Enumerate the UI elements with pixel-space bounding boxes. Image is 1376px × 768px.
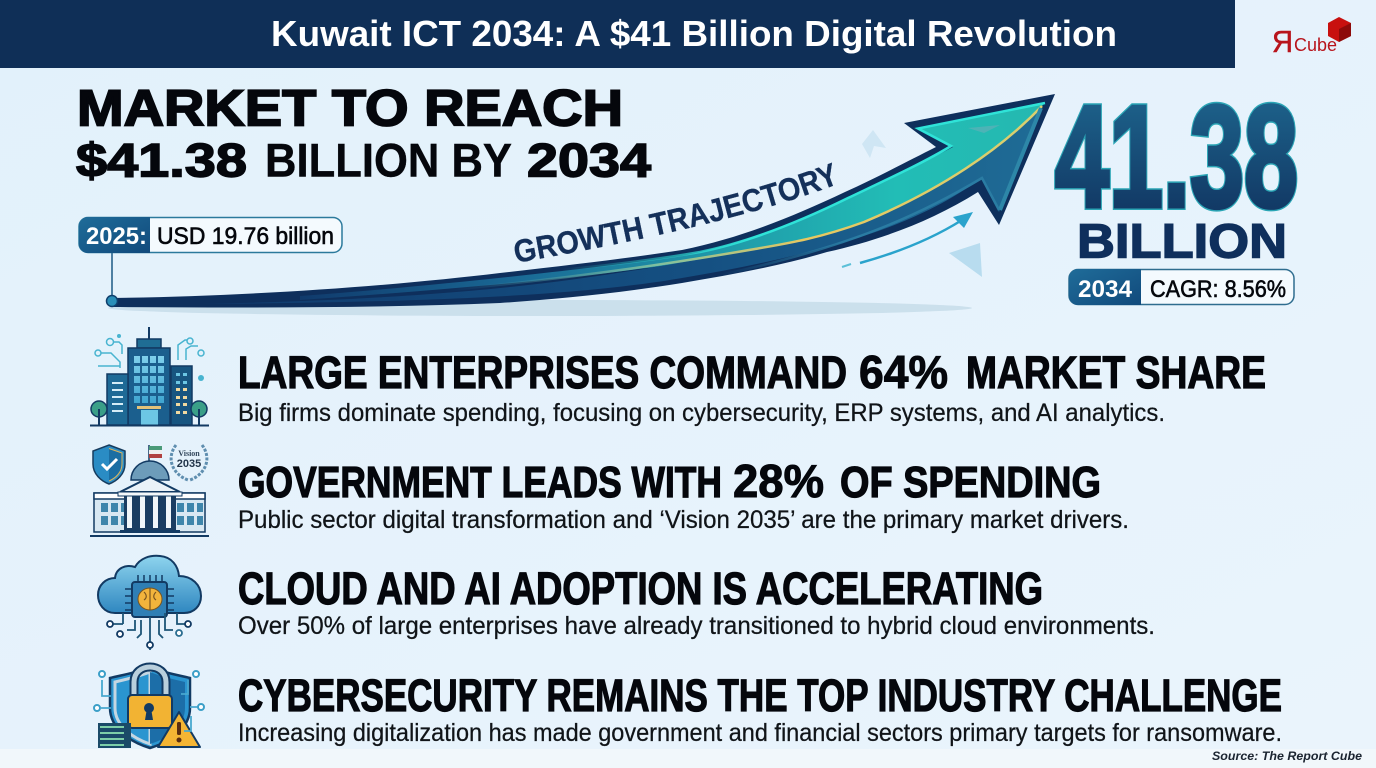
big number: 41.38 billion: BILLION	[1077, 216, 1287, 268]
callout: 2034 cagr: CAGR: 8.56%	[1150, 276, 1286, 303]
callout: 2025 value: 2025:	[86, 223, 147, 250]
logo: RCube: Cube	[1294, 35, 1337, 55]
icon: government building and vision 2035: 2035	[177, 458, 201, 470]
heading: cloud and ai: CLOUD AND AI ADOPTION IS ACCELERATING	[238, 563, 1043, 614]
callout: 2034 cagr: 2034	[1078, 276, 1133, 303]
source note: Source: The Report Cube	[1212, 751, 1363, 763]
label: growth trajectory: GROWTH TRAJECTORY	[514, 162, 833, 262]
callout: 2034 cagr	[1069, 269, 1294, 305]
text: cybersecurity detail: Increasing digitalization has made government and financial sectors primary targets for ransomware.	[238, 719, 1282, 747]
text: large enterprises detail: Big firms dominate spending, focusing on cybersecurity, ERP systems, and AI analytics.	[238, 399, 1165, 427]
callout: 2025 value: USD 19.76 billion	[157, 223, 334, 250]
logo: RCube	[1272, 17, 1351, 59]
icon: government building and vision 2035	[90, 445, 209, 537]
heading: government: OF SPENDING	[840, 458, 1101, 507]
headline: market to reach: 2034	[527, 134, 651, 186]
heading: large enterprises: LARGE ENTERPRISES COMMAND	[238, 347, 847, 398]
heading: government	[238, 455, 1101, 507]
headline: market to reach: MARKET TO REACH	[77, 80, 623, 136]
icon: office buildings	[90, 327, 209, 426]
icon: cybersecurity shield and padlock	[94, 667, 204, 748]
text: cloud detail: Over 50% of large enterprises have already transitioned to hybrid cloud environments.	[238, 612, 1155, 640]
icon: government building and vision 2035: Vision	[178, 449, 200, 458]
heading: government: 28%	[733, 455, 824, 507]
headline: market to reach: BILLION BY	[265, 134, 512, 186]
title banner: Kuwait ICT 2034: A $41 Billion Digital Revolution	[271, 13, 1117, 54]
growth arrow chart	[106, 94, 1055, 316]
headline: market to reach: $41.38	[76, 134, 247, 186]
callout: 2025 value	[79, 217, 342, 298]
heading: large enterprises: MARKET SHARE	[966, 347, 1266, 398]
icon: cloud with AI chip	[98, 556, 201, 650]
headline: market to reach	[76, 80, 651, 186]
logo: RCube: Я	[1272, 24, 1293, 59]
big number: 41.38 billion	[1055, 76, 1298, 268]
heading: government: GOVERNMENT LEADS WITH	[238, 458, 722, 507]
text: government detail: Public sector digital transformation and ‘Vision 2035’ are the primary market drivers.	[238, 506, 1129, 534]
heading: large enterprises: 64%	[859, 346, 948, 398]
title banner	[0, 0, 1235, 68]
